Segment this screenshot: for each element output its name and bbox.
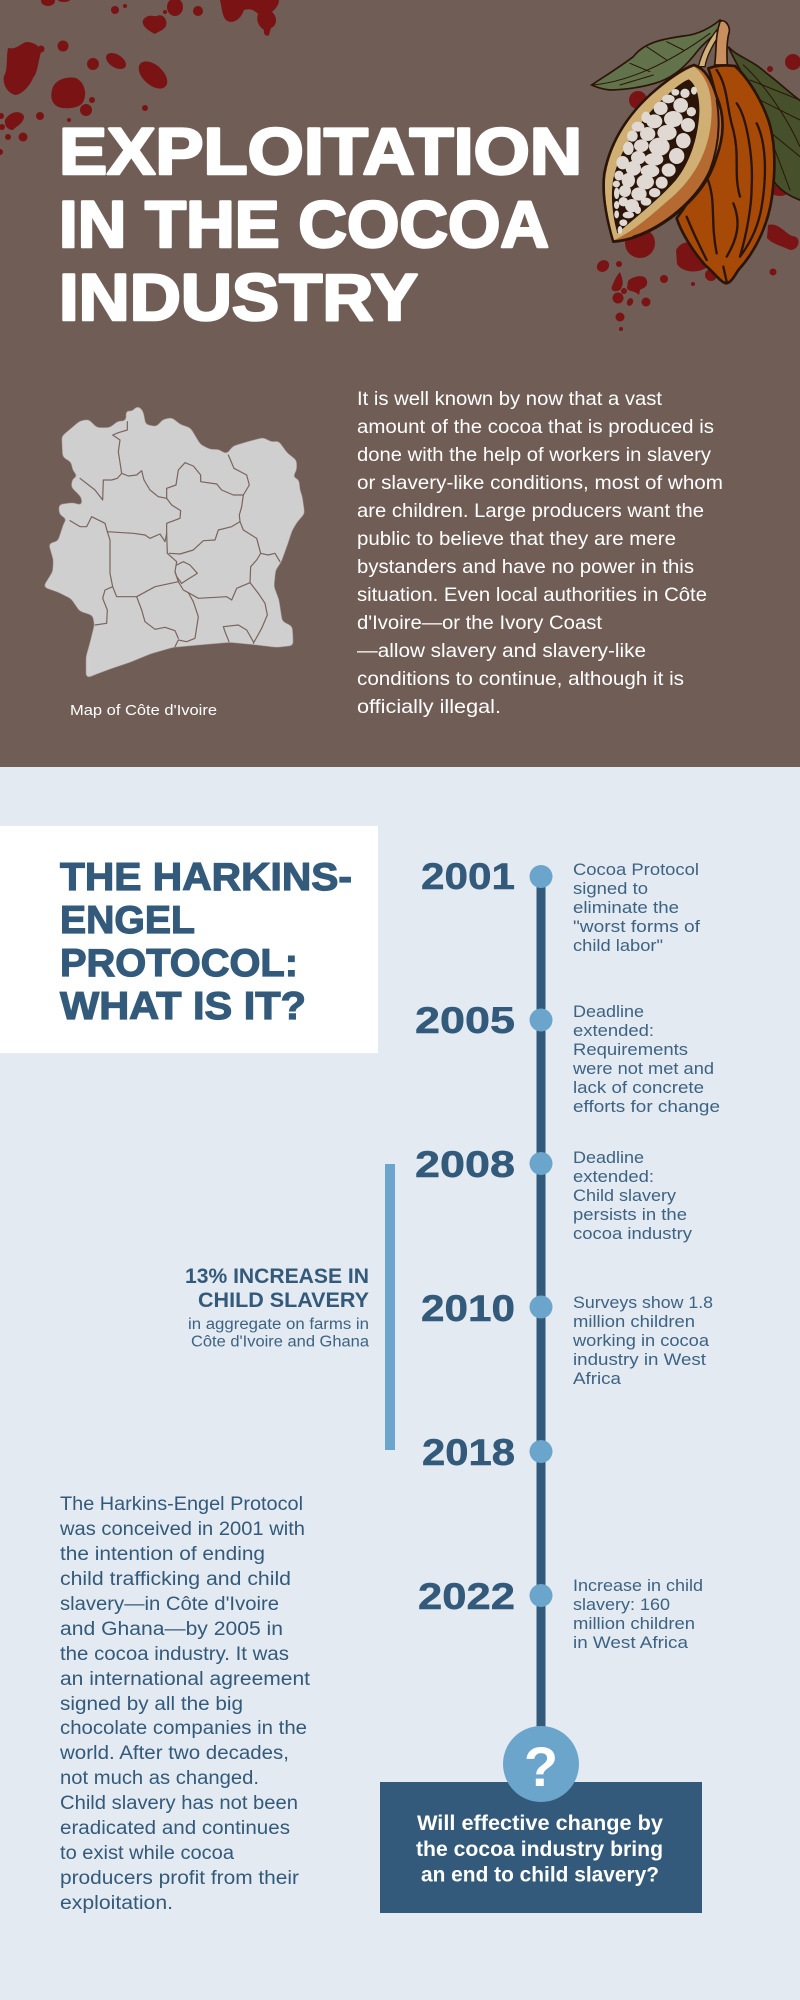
protocol description text: The Harkins-Engel Protocol [60,1494,303,1515]
protocol description text: slavery—in Côte d'Ivoire [60,1594,279,1615]
event 2005 [415,1000,720,1116]
timeline [415,856,720,1746]
panel: lower section background [0,768,800,2000]
event 2005: extended: [573,1021,654,1040]
timeline spine [536,876,546,1746]
protocol description text: signed by all the big [60,1694,243,1715]
panel: protocol heading [0,826,378,1053]
event 2008: Deadline [573,1148,644,1167]
protocol description text [59,1494,311,1914]
event 2022: 2022 [418,1576,515,1617]
panel: header [0,0,800,767]
back right leaf [728,47,800,201]
icon: cocoa pods with leaves [592,20,800,283]
event 2018: 2018 [422,1432,515,1473]
callout: 13% increase in child slavery: Côte d'Ivoire and Ghana [191,1334,369,1350]
intro text block: situation. Even local authorities in Côte [357,584,707,606]
stem [698,30,718,67]
protocol description text: the intention of ending [60,1544,265,1565]
map of Côte d'Ivoire [44,407,304,677]
protocol description text: world. After two decades, [59,1743,289,1764]
event 2005: lack of concrete [573,1078,704,1097]
closed orange pod [677,65,774,283]
open pod husk [604,65,723,242]
protocol description text: and Ghana—by 2005 in [60,1619,283,1640]
event 2001: Cocoa Protocol [573,860,699,879]
left leaf [592,20,727,90]
icon: question mark circle: ? [524,1735,558,1798]
event 2008: persists in the [573,1205,687,1224]
title: IN THE COCOA [59,187,549,261]
protocol description text: to exist while cocoa [60,1843,234,1864]
event 2001: 2001 [421,856,515,897]
callout: 13% increase range bar [385,1164,395,1450]
protocol description text: chocolate companies in the [60,1718,307,1739]
event 2008: 2008 [415,1144,515,1185]
intro text block: It is well known by now that a vast [357,388,663,410]
event 2022: slavery: 160 [573,1595,670,1614]
protocol description text: an international agreement [60,1669,311,1690]
event 2010: 2010 [421,1288,515,1329]
cocoa beans [613,87,696,233]
intro text block: conditions to continue, although it is [357,668,684,690]
panel: protocol heading: THE HARKINS- [60,856,352,899]
map region borders [70,422,280,647]
intro text block: d'Ivoire—or the Ivory Coast [357,612,603,634]
event 2008: Child slavery [573,1186,677,1205]
panel: closing question box [380,1782,702,1913]
event 2008: cocoa industry [573,1224,693,1243]
protocol description text: Child slavery has not been [60,1793,298,1814]
callout: 13% increase in child slavery [185,1265,369,1350]
event 2005: were not met and [572,1059,714,1078]
panel: closing question box: an end to child slavery? [421,1864,659,1886]
event 2010: working in cocoa [572,1331,710,1350]
protocol description text: eradicated and continues [60,1818,290,1839]
protocol description text: exploitation. [60,1893,173,1914]
intro text block: or slavery-like conditions, most of whom [357,472,723,494]
panel: closing question box: Will effective change by [417,1812,663,1835]
title [59,114,582,334]
event 2010: Surveys show 1.8 [573,1293,713,1312]
title: INDUSTRY [59,260,418,334]
event 2001: "worst forms of [573,917,700,936]
protocol description text: the cocoa industry. It was [60,1644,289,1665]
blood splatter: top left [0,0,279,155]
event 2005: 2005 [415,1000,515,1041]
protocol description text: child trafficking and child [60,1569,291,1590]
panel: protocol heading: WHAT IS IT? [60,985,306,1028]
intro text block: officially illegal. [357,696,501,718]
map caption: Map of Côte d'Ivoire [70,703,217,719]
callout: 13% increase in child slavery: CHILD SLAVERY [198,1289,369,1312]
event 2001: child labor" [573,936,663,955]
event 2001: eliminate the [573,898,679,917]
event 2005: Requirements [573,1040,688,1059]
event 2022 [418,1576,703,1652]
protocol description text: producers profit from their [60,1868,300,1889]
blood splatter: behind cocoa pods [594,54,800,331]
event 2022: Increase in child [573,1576,703,1595]
panel: closing question box: the cocoa industry bring [416,1838,663,1861]
callout: 13% increase in child slavery: in aggregate on farms in [188,1316,369,1333]
event 2008 [415,1144,693,1243]
intro text block: done with the help of workers in slavery [357,444,711,466]
intro text block: bystanders and have no power in this [357,556,694,578]
event 2005: Deadline [573,1002,644,1021]
intro text block [357,388,723,718]
panel: protocol heading: PROTOCOL: [60,942,298,985]
intro text block: —allow slavery and slavery-like [357,640,646,662]
intro text block: are children. Large producers want the [357,500,704,522]
protocol description text: was conceived in 2001 with [59,1519,305,1540]
event 2018 [422,1432,552,1473]
event 2010 [421,1288,713,1388]
event 2022: in West Africa [573,1633,689,1652]
callout: 13% increase in child slavery: 13% INCREASE IN [185,1265,369,1288]
event 2010: industry in West [573,1350,706,1369]
event 2022: million children [573,1614,695,1633]
icon: question mark circle [503,1726,579,1802]
panel: protocol heading: ENGEL [60,899,195,942]
event 2010: million children [573,1312,695,1331]
title: EXPLOITATION [59,114,582,188]
event 2008: extended: [573,1167,654,1186]
intro text block: public to believe that they are mere [357,528,676,550]
intro text block: amount of the cocoa that is produced is [357,416,714,438]
event 2001 [421,856,700,955]
event 2005: efforts for change [573,1097,720,1116]
event 2010: Africa [573,1369,622,1388]
open pod cavity [612,79,699,233]
event 2001: signed to [573,879,648,898]
protocol description text: not much as changed. [60,1768,259,1789]
